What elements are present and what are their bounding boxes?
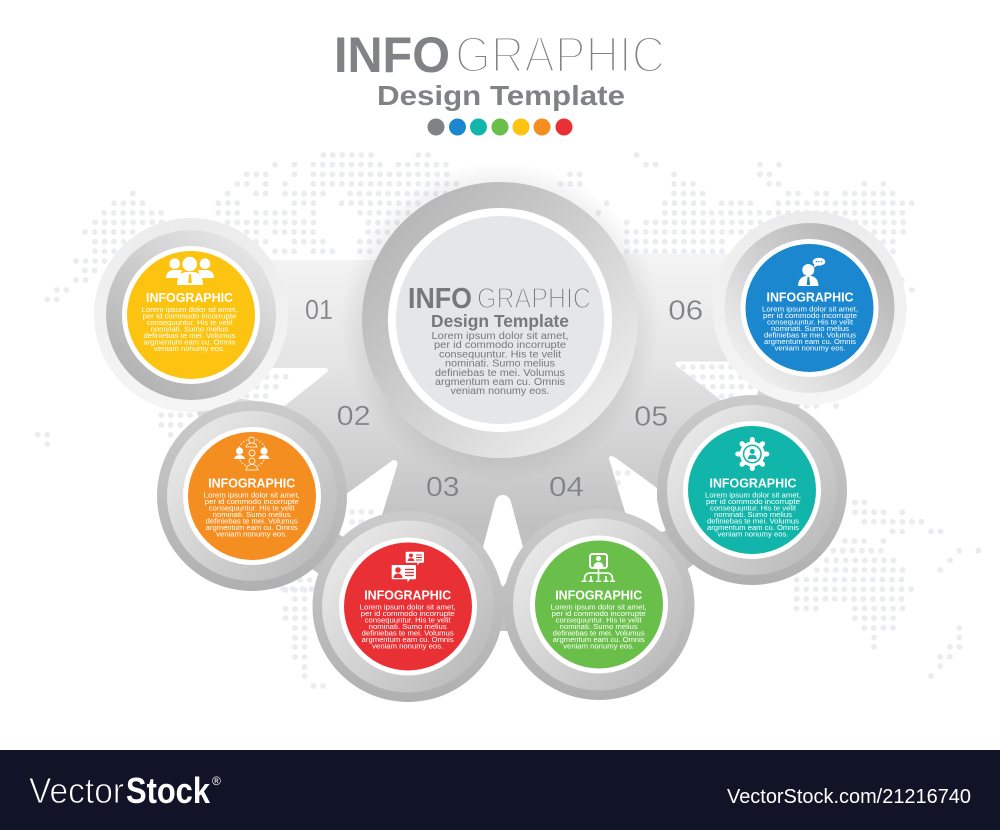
icon: three business people (166, 257, 214, 285)
panel: step 1 yellow: argmentum eam cu. Omnis (144, 340, 236, 346)
panel: step 5 teal: argmentum eam cu. Omnis (707, 525, 800, 532)
panel: step 3 red: per id commodo incorrupte (361, 611, 455, 618)
number 05: 05 (634, 400, 668, 432)
panel: step 1 yellow: nominati. Sumo melius (150, 326, 229, 334)
panel: centre circle: INFO (408, 283, 472, 315)
panel: step 3 red: definiebas te mei. Volumus (362, 630, 454, 637)
panel: step 5 teal: definiebas te mei. Volumus (707, 518, 800, 526)
panel: step 2 orange: INFOGRAPHIC (208, 475, 296, 490)
panel: step 5 teal: consequuntur. His te velit (710, 506, 796, 512)
panel: step 1 yellow: INFOGRAPHIC (146, 290, 234, 305)
panel: step 3 red (312, 511, 504, 702)
panel: step 1 yellow: definiebas te mei. Volumus (144, 333, 236, 340)
panel: step 1 yellow: consequuntur. His te velit (146, 320, 233, 327)
panel: step 2 orange: nominati. Sumo melius (213, 512, 291, 519)
panel: step 6 blue: nominati. Sumo melius (771, 326, 850, 333)
panel: step 6 blue (712, 211, 906, 405)
panel: step 6 blue: consequuntur. His te velit (767, 320, 853, 327)
panel: step 3 red: INFOGRAPHIC (364, 587, 452, 602)
panel: step 5 teal: veniam nonumy eos. (718, 532, 789, 538)
panel: centre circle: veniam nonumy eos. (450, 385, 550, 397)
centre circle soft shadow (340, 162, 660, 482)
icon: monitor hierarchy (582, 554, 615, 582)
panel: step 2 orange: Lorem ipsum dolor sit amet, (204, 492, 300, 500)
panel: step 6 blue: Lorem ipsum dolor sit amet, (762, 307, 858, 314)
panel: centre circle: definiebas te mei. Volumus (435, 367, 565, 379)
panel: step 4 green: per id commodo incorrupte (552, 611, 646, 618)
panel: centre circle: Design Template (431, 311, 569, 331)
panel: step 3 red: argmentum eam cu. Omnis (362, 637, 454, 644)
colour dots row (428, 118, 572, 136)
number 01: 01 (305, 294, 333, 325)
panel: step 4 green: INFOGRAPHIC (555, 587, 643, 602)
title (334, 26, 665, 111)
panel: step 2 orange: argmentum eam cu. Omnis (206, 525, 298, 532)
panel: centre circle: consequuntur. His te velit (439, 348, 561, 360)
footer bar: ® (212, 774, 221, 788)
panel: step 1 yellow: per id commodo incorrupte (142, 314, 237, 320)
panel: step 5 teal: INFOGRAPHIC (710, 475, 797, 490)
panel: step 2 orange (157, 401, 347, 591)
panel: step 6 blue: argmentum eam cu. Omnis (764, 339, 857, 346)
footer bar: Stock (126, 770, 211, 811)
icon: network of people (234, 437, 270, 470)
panel: step 6 blue: definiebas te mei. Volumus (764, 333, 857, 340)
panel: step 3 red: consequuntur. His te velit (365, 617, 451, 624)
panel: step 4 green: argmentum eam cu. Omnis (553, 637, 645, 644)
icon: gear with person (738, 440, 767, 468)
panel: step 2 orange: definiebas te mei. Volumus (206, 518, 298, 526)
panel: centre circle: GRAPHIC (477, 283, 591, 315)
panel: centre circle: Lorem ipsum dolor sit amet, (432, 330, 568, 342)
panel: step 5 teal (657, 395, 847, 585)
number 03: 03 (426, 471, 460, 502)
panel: step 3 red: Lorem ipsum dolor sit amet, (360, 604, 456, 611)
title: GRAPHIC (455, 26, 665, 83)
panel: step 3 red: nominati. Sumo melius (369, 624, 447, 631)
number 02: 02 (337, 400, 371, 431)
panel: step 5 teal: Lorem ipsum dolor sit amet, (705, 492, 801, 500)
panel: step 1 yellow: veniam nonumy eos. (154, 346, 225, 353)
panel: step 2 orange: veniam nonumy eos. (216, 532, 287, 538)
panel: centre circle: per id commodo incorrupte (434, 339, 566, 351)
footer bar (0, 750, 1000, 830)
number 04: 04 (549, 471, 584, 502)
panel: step 4 green: definiebas te mei. Volumus (553, 630, 645, 637)
panel: step 4 green: Lorem ipsum dolor sit amet, (551, 604, 647, 611)
icon: contact cards chat (392, 552, 424, 582)
icon: person with speech bubble (798, 258, 825, 286)
number 06: 06 (668, 294, 703, 325)
panel: step 4 green: veniam nonumy eos. (563, 643, 634, 650)
panel: centre circle: argmentum eam cu. Omnis (435, 376, 565, 388)
dotted world map background (38, 155, 978, 686)
panel: step 1 yellow (94, 218, 288, 412)
panel: step 5 teal: per id commodo incorrupte (706, 499, 800, 506)
panel: step 4 green: nominati. Sumo melius (560, 624, 638, 631)
panel: step 4 green: consequuntur. His te velit (556, 617, 642, 624)
panel: step 4 green (504, 509, 694, 700)
connector body with windows (191, 254, 810, 609)
panel: centre circle (362, 182, 638, 458)
panel: step 5 teal: nominati. Sumo melius (714, 512, 793, 519)
panel: step 6 blue: INFOGRAPHIC (766, 290, 854, 305)
title: Design Template (377, 80, 625, 111)
panel: centre circle: nominati. Sumo melius (445, 358, 555, 370)
panel: step 6 blue: per id commodo incorrupte (763, 313, 857, 320)
panel: step 2 orange: per id commodo incorrupte (205, 499, 299, 506)
panel: step 3 red: veniam nonumy eos. (372, 643, 443, 650)
footer bar: Vector (29, 770, 124, 811)
panel: step 2 orange: consequuntur. His te velit (209, 506, 295, 512)
title: INFO (334, 27, 450, 83)
footer bar: VectorStock.com/21216740 (727, 786, 971, 808)
panel: step 6 blue: veniam nonumy eos. (774, 346, 846, 353)
panel: step 1 yellow: Lorem ipsum dolor sit amet, (142, 307, 238, 314)
